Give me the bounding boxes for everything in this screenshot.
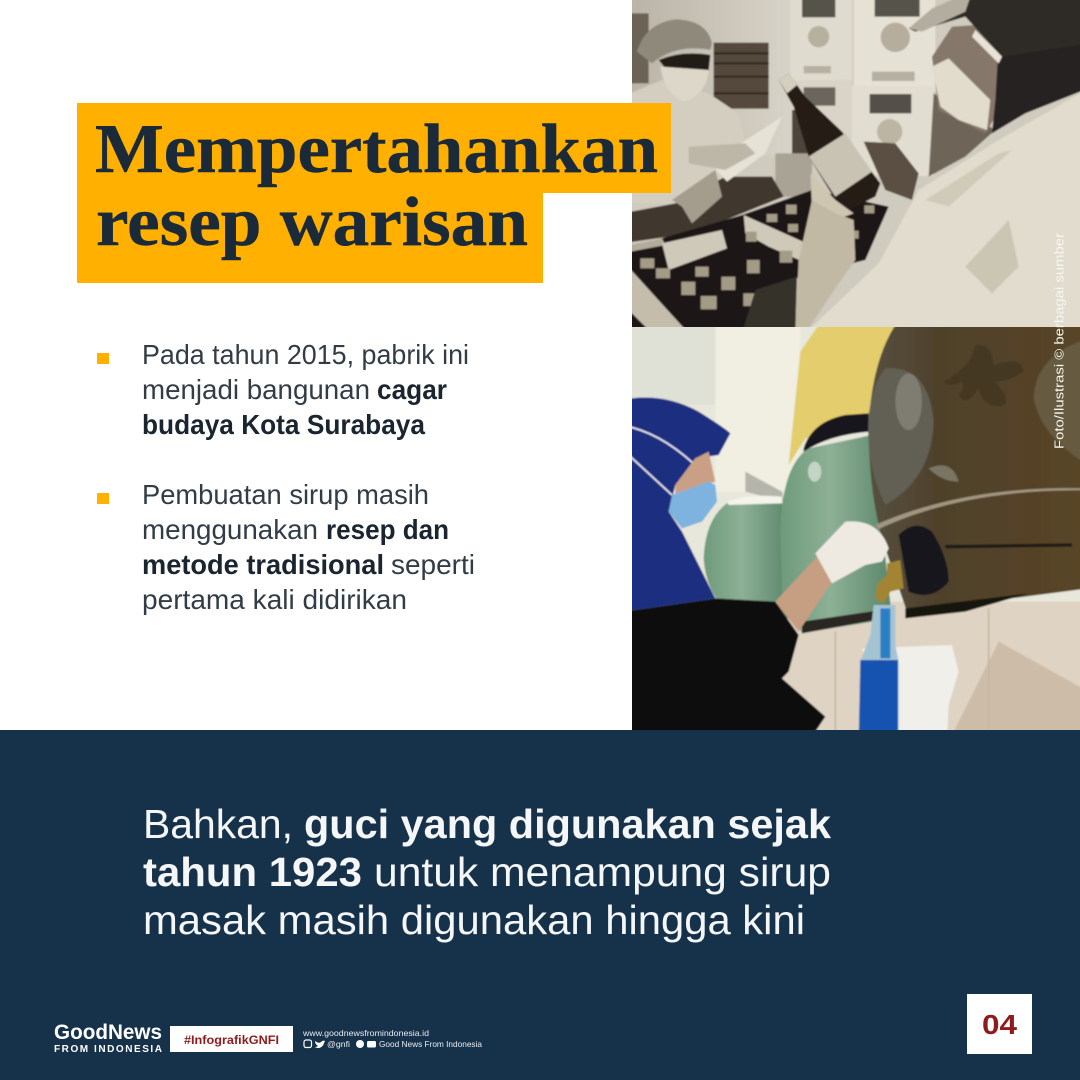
page number: 04 (982, 1009, 1017, 1040)
closing statement: untuk menampung sirup (374, 849, 831, 895)
icon: youtube (367, 1041, 376, 1048)
bottle in hand (779, 73, 880, 210)
bullet icon (97, 353, 109, 364)
photo: workers inspecting Siropen bottles (622, 0, 1080, 337)
logo: GoodNews from Indonesia (54, 1021, 162, 1055)
tap (875, 560, 904, 603)
title highlight (77, 103, 671, 283)
contact details: Good News From Indonesia (379, 1039, 482, 1049)
bullet point: resep tradisional: menggunakan (142, 514, 318, 545)
icon: facebook (356, 1040, 364, 1048)
bullet point: cagar budaya: menjadi bangunan (142, 374, 370, 405)
woman (632, 597, 826, 730)
title: Mempertahankan (95, 111, 658, 188)
closing statement: Bahkan, (143, 801, 293, 847)
bullet point: resep tradisional: metode tradisional (142, 549, 384, 580)
photo credit: Foto/Ilustrasi © berbagai sumber (1052, 232, 1066, 449)
bullet point: resep tradisional: Pembuatan sirup masih (142, 479, 429, 510)
left worker (632, 80, 732, 157)
hands (864, 142, 919, 200)
right worker (795, 200, 855, 333)
bullet point: resep tradisional: seperti (391, 549, 475, 580)
hashtag badge: #InfografikGNFI (184, 1033, 279, 1047)
closing statement: guci yang digunakan sejak (304, 801, 831, 847)
title (77, 103, 671, 283)
bullet point: resep tradisional: resep dan (326, 514, 449, 545)
contact details: www.goodnewsfromindonesia.id (302, 1028, 429, 1038)
contact details (302, 1028, 482, 1049)
crates (622, 190, 889, 337)
closing statement: masak masih digunakan hingga kini (143, 897, 805, 943)
title: resep warisan (96, 184, 528, 261)
logo: GoodNews from Indonesia: FROM INDONESIA (54, 1044, 162, 1055)
logo: GoodNews from Indonesia: GoodNews (54, 1021, 162, 1044)
bullet point: resep tradisional (97, 479, 475, 615)
bullet point: cagar budaya (97, 339, 469, 440)
closing statement (143, 801, 831, 943)
bullet icon (97, 493, 109, 504)
bottle and pitcher (862, 644, 959, 730)
bullet point: cagar budaya: Pada tahun 2015, pabrik ini (142, 339, 469, 370)
bullet point: cagar budaya: cagar (377, 374, 447, 405)
bullet point: resep tradisional: pertama kali didirikan (142, 584, 407, 615)
bottom band (0, 730, 1080, 1080)
icon: twitter (315, 1041, 325, 1048)
closing statement: tahun 1923 (143, 849, 362, 895)
large heritage jar (869, 325, 1080, 617)
photo: woman filling a bottle from the heritage jar (622, 315, 1080, 748)
icon: instagram (304, 1040, 312, 1048)
green jars (704, 500, 789, 618)
contact details: @gnfi (327, 1039, 350, 1049)
page number (967, 994, 1032, 1054)
tiled wall (779, 602, 1080, 742)
bullet point: cagar budaya: budaya Kota Surabaya (142, 409, 425, 440)
hashtag badge (170, 1026, 293, 1052)
